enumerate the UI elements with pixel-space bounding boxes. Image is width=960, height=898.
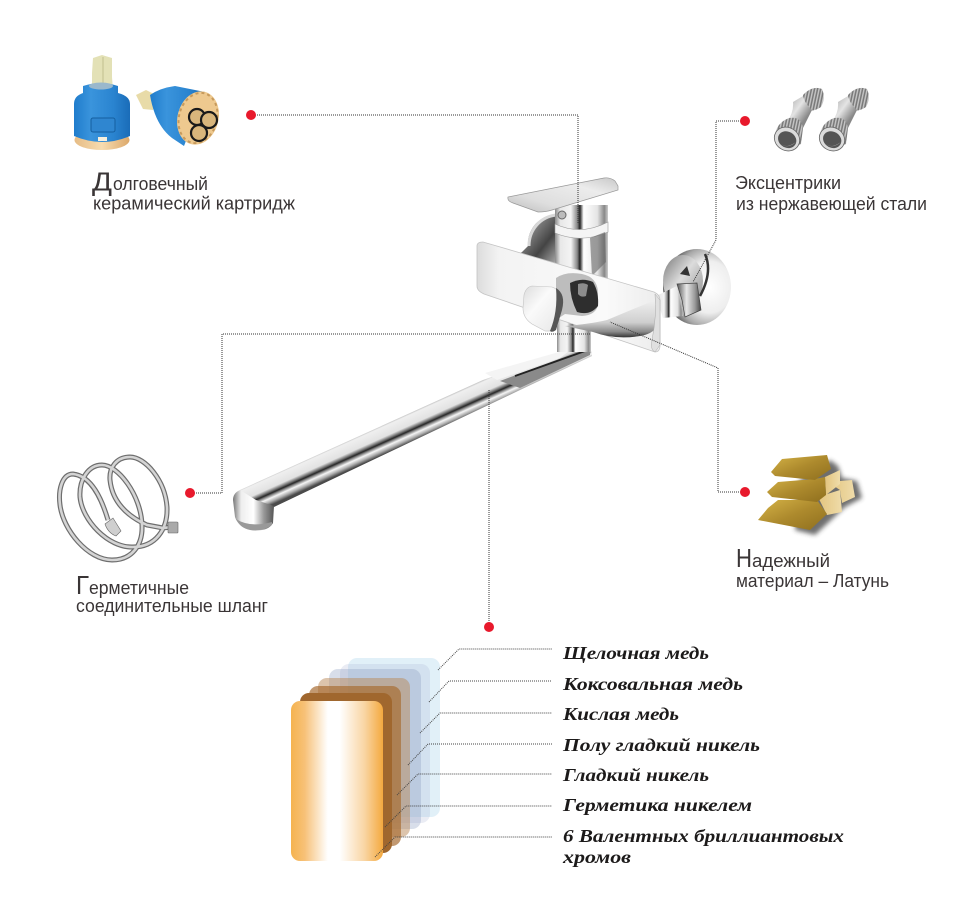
marker: eccentrics: [740, 116, 750, 126]
ingot small bar: [818, 490, 842, 515]
leaders: coating labels: [375, 649, 552, 857]
text: eccentrics caption: из нержавеющей стали: [736, 194, 927, 214]
icon: brass ingots: [758, 455, 862, 535]
leader: coating to spout: [488, 390, 490, 627]
icon: hose: [60, 457, 178, 560]
text: cartridge caption: керамический картридж: [93, 194, 295, 214]
text: hose caption: ерметичные: [89, 578, 189, 598]
layer: nickel sealing: [300, 693, 392, 853]
text: hose caption: [76, 570, 268, 616]
text: coating labels: Щелочная медь: [562, 643, 709, 663]
faucet neck: [557, 320, 591, 352]
text: eccentrics caption: Эксцентрики: [735, 173, 841, 193]
text: coating labels: Герметика никелем: [562, 795, 752, 815]
text: hose caption: Г: [76, 570, 89, 600]
text: coating labels: хромов: [562, 847, 631, 867]
text: brass caption: материал – Латунь: [736, 571, 889, 591]
panel: faucet: [233, 178, 731, 530]
layer: bright nickel: [309, 686, 401, 846]
text: hose caption: соединительные шланг: [76, 596, 268, 616]
cartridge upright: [74, 55, 130, 150]
leader: eccentrics to faucet: [693, 121, 745, 282]
text: coating labels: Гладкий никель: [562, 765, 709, 785]
faucet spout: [233, 346, 592, 530]
text: coating labels: [562, 643, 844, 867]
leader: hose to faucet: [190, 334, 590, 493]
faucet rear elbow: [516, 214, 560, 270]
ingot bottom: [758, 500, 827, 530]
layer: alkaline copper: [348, 658, 440, 817]
leader: brass to faucet: [610, 322, 745, 492]
text: cartridge caption: [92, 166, 295, 214]
ingot rear bar: [825, 470, 840, 495]
faucet lever: [508, 178, 618, 212]
marker: brass: [740, 487, 750, 497]
ingot top: [771, 455, 831, 480]
text: coating labels: Коксовальная медь: [562, 674, 743, 694]
layer: semi-bright nickel: [318, 678, 410, 837]
faucet body: [555, 205, 608, 285]
layer: acid copper: [329, 669, 421, 829]
layer: hexavalent chrome: [291, 701, 383, 861]
chart: coating layers: [291, 658, 440, 861]
ingot middle: [767, 477, 826, 502]
text: cartridge caption: олговечный: [113, 174, 208, 194]
text: brass caption: адежный: [752, 551, 830, 571]
marker: coating: [484, 622, 494, 632]
ingot shadow: [795, 460, 862, 535]
text: coating labels: Полу гладкий никель: [562, 735, 760, 755]
marker: hose: [185, 488, 195, 498]
text: coating labels: 6 Валентных бриллиантовых: [563, 826, 844, 846]
faucet knob: [523, 286, 563, 332]
text: brass caption: Н: [736, 543, 752, 573]
wall escutcheon: [656, 249, 731, 325]
ingot far bar: [828, 480, 855, 503]
text: brass caption: [736, 543, 889, 591]
faucet handle connector: [553, 273, 598, 322]
faucet plate: [477, 242, 660, 352]
text: cartridge caption: Д: [92, 166, 112, 196]
cartridge tilted: [136, 86, 225, 149]
leader: cartridge to faucet: [251, 115, 578, 223]
text: eccentrics caption: [735, 173, 927, 214]
text: coating labels: Кислая медь: [562, 704, 679, 724]
layer: coke copper: [340, 664, 430, 823]
icon: ceramic cartridges: [74, 55, 225, 150]
icon: eccentrics: [770, 88, 869, 155]
marker: cartridge: [246, 110, 256, 120]
